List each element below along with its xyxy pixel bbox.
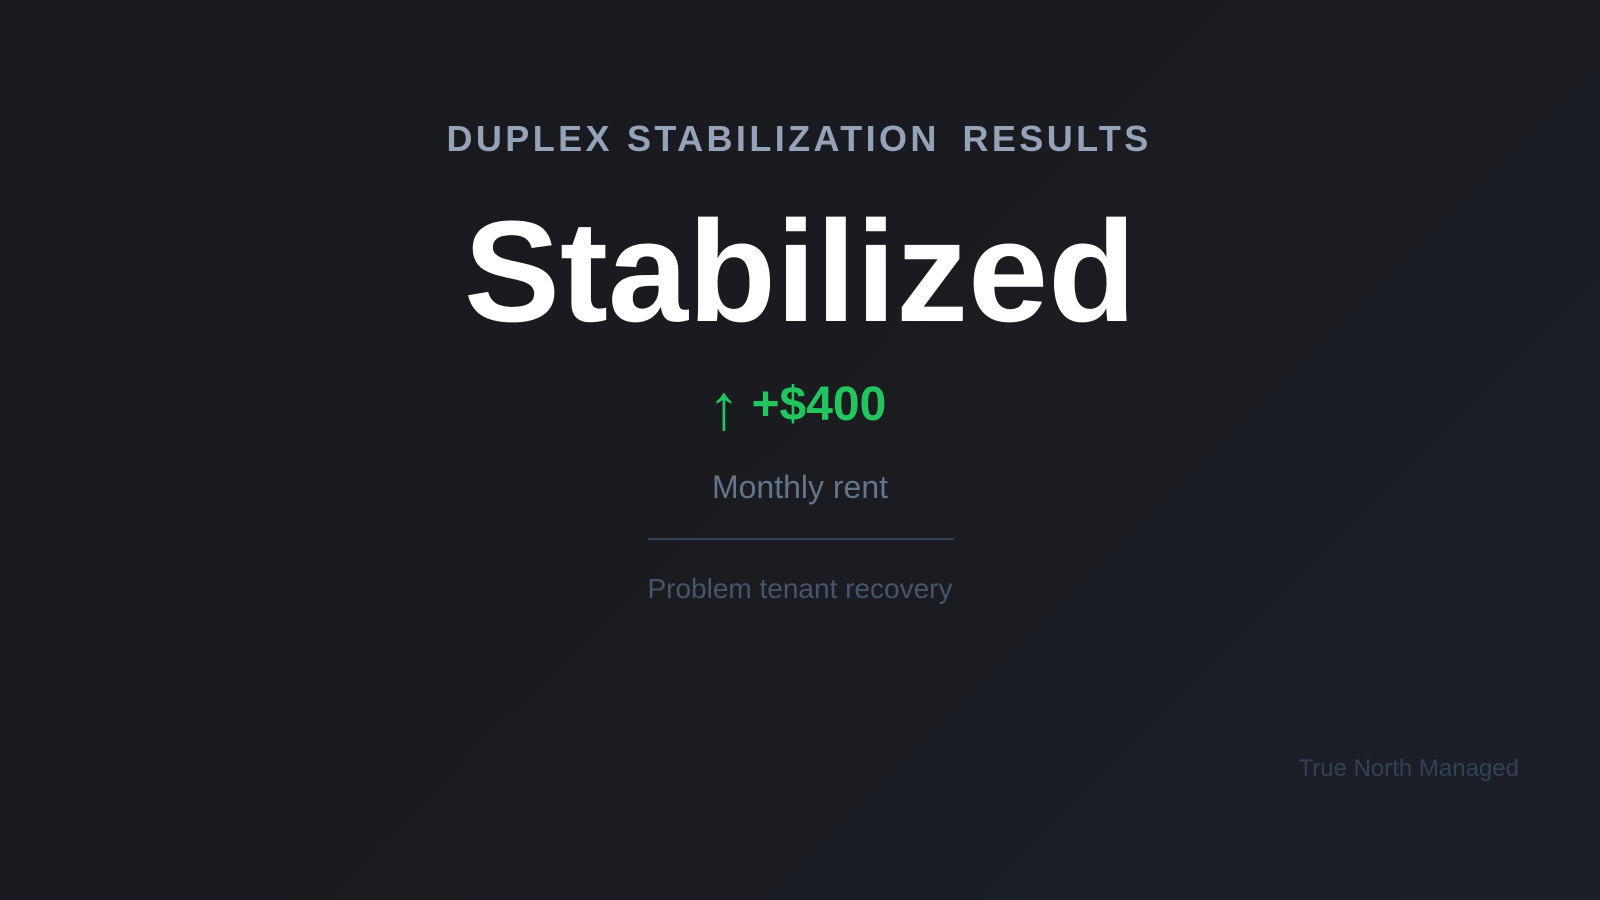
eyebrow heading: RESULTS xyxy=(962,118,1152,159)
divider xyxy=(648,538,954,540)
eyebrow heading: DUPLEX xyxy=(446,118,613,159)
eyebrow heading: STABILIZATION xyxy=(627,118,940,159)
eyebrow heading xyxy=(446,118,1152,159)
main title: Stabilized xyxy=(464,191,1136,352)
brand footer: True North Managed xyxy=(1298,755,1519,782)
icon: up arrow: ↑ xyxy=(708,371,740,443)
metric label: Monthly rent xyxy=(712,469,888,505)
rent increase value: +$400 xyxy=(752,378,886,431)
caption: Problem tenant recovery xyxy=(647,573,953,604)
rent increase metric with up arrow xyxy=(708,371,886,443)
